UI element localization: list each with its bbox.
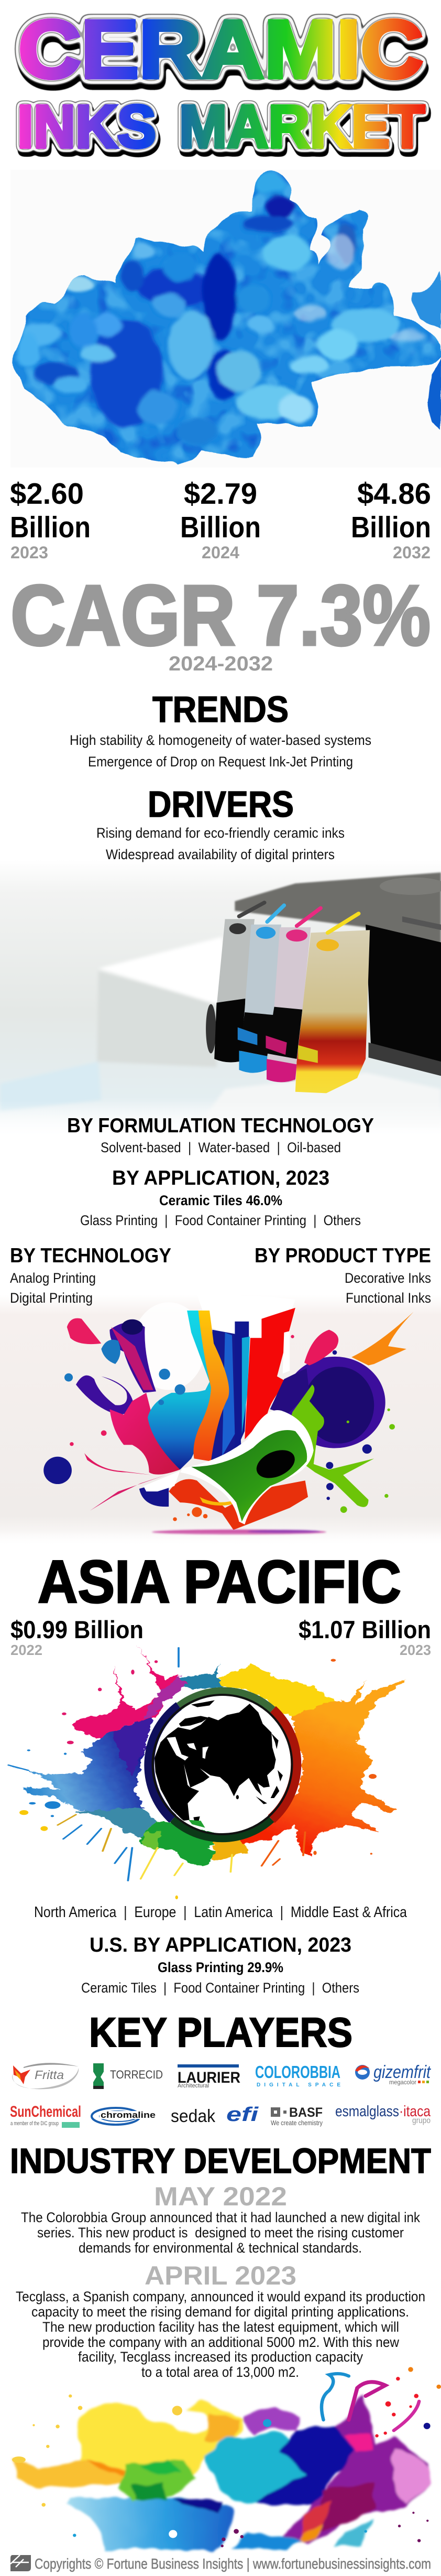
stat: 2024 market size: [180, 477, 261, 562]
panel: by technology: BY TECHNOLOGY: [10, 1244, 171, 1267]
stat: 2032 market size: $4.86: [357, 477, 431, 511]
stat: 2023 market size: $2.60: [10, 477, 84, 511]
development: April 2023: provide the company with an additional 5000 m2. With this new: [42, 2334, 400, 2350]
logo: Laurier: LAURIER: [178, 2069, 240, 2086]
logo: Torrecid: TORRECID: [110, 2068, 163, 2081]
leading U.S. application: Glass Printing 29.9%: [158, 1960, 283, 1975]
trends list: High stability & homogeneity of water-based systems: [70, 732, 371, 748]
stat: Asia Pacific 2022: $0.99 Billion: [10, 1616, 144, 1643]
globe: [154, 1696, 290, 1833]
logo: Fritta: Fritta: [35, 2068, 64, 2082]
heading: trends: TRENDS: [152, 689, 289, 730]
logo: Esmalglass Itaca: [335, 2103, 431, 2125]
stat: 2032 market size: Billion: [351, 511, 431, 544]
logo: Chromaline: chromaline: [101, 2110, 156, 2120]
title line 2: INKS: [17, 93, 156, 160]
leading application: Ceramic Tiles 46.0%: [159, 1193, 282, 1208]
development: April 2023: capacity to meet the rising demand for digital printing applications.: [31, 2304, 409, 2320]
CAGR period: 2024-2032: [169, 653, 273, 675]
stat: Asia Pacific 2022: 2022: [10, 1642, 42, 1658]
stat: Asia Pacific 2023: $1.07 Billion: [299, 1616, 431, 1643]
trends list: Emergence of Drop on Request Ink-Jet Printing: [88, 754, 353, 770]
logo: Esmalglass Itaca: ·itaca: [399, 2103, 431, 2120]
development: April 2023: facility, Tecglass increased its production capacity: [78, 2349, 363, 2365]
title line 1: CERAMIC: [18, 4, 423, 95]
logo: Laurier: [178, 2064, 240, 2089]
heading: by application: BY APPLICATION, 2023: [112, 1167, 329, 1189]
yellow tank: [295, 930, 370, 1093]
stat: Asia Pacific 2022: [10, 1616, 144, 1658]
logo: Esmalglass Itaca: grupo: [412, 2116, 431, 2125]
development: April 2023: APRIL 2023: [145, 2261, 296, 2290]
black tank: [215, 919, 255, 1062]
image: rainbow ink splash: [12, 2367, 441, 2550]
logo: BASF: [271, 2105, 323, 2127]
stat: 2023 market size: Billion: [10, 511, 91, 544]
image: printer with ink tanks: [0, 860, 441, 1139]
trends list: [70, 732, 371, 770]
magenta tank: [267, 927, 311, 1083]
image: colourful paint splash: [0, 1294, 441, 1546]
title line 2: MARKET: [179, 93, 425, 160]
stat: 2024 market size: Billion: [180, 511, 261, 544]
stat: 2032 market size: [351, 477, 431, 562]
development: May 2022: MAY 2022: [154, 2182, 287, 2211]
heading: Asia Pacific: ASIA PACIFIC: [38, 1549, 401, 1616]
stat: 2024 market size: $2.79: [184, 477, 257, 511]
heading: by formulation technology: BY FORMULATION TECHNOLOGY: [67, 1114, 374, 1137]
logo: Gizemfrit: [355, 2062, 431, 2086]
panel: by technology: Analog Printing: [10, 1270, 96, 1286]
logo: Sun Chemical: [10, 2103, 81, 2128]
title line 2: [17, 93, 425, 160]
panel: by product type: Decorative Inks: [345, 1270, 431, 1286]
logo: Fritta: [12, 2063, 79, 2089]
logo: Gizemfrit: megacolor: [389, 2079, 416, 2086]
logo: Torrecid: [93, 2063, 163, 2089]
cyan tank: [239, 925, 281, 1073]
heading: key players: KEY PLAYERS: [89, 2009, 352, 2055]
stat: 2023 market size: 2023: [10, 543, 48, 562]
logo: Sedak: sedak: [171, 2106, 216, 2126]
image: blue ink cloud: [0, 161, 441, 472]
logo: Laurier: Architectural: [178, 2083, 209, 2089]
title: Ceramic Inks Market: [17, 4, 425, 160]
stat: Asia Pacific 2023: 2023: [400, 1642, 431, 1658]
development: May 2022: demands for environmental & technical standards.: [79, 2240, 362, 2256]
logo: BASF: BASF: [289, 2105, 323, 2120]
development: April 2023: The new production facility has the latest equipment, which will: [42, 2319, 399, 2335]
application list: Glass Printing | Food Container Printing | Others: [80, 1213, 361, 1228]
logo: Gizemfrit: gizemfrit: [373, 2062, 431, 2082]
development: April 2023: [16, 2261, 425, 2380]
splash colours: [8, 1645, 408, 1865]
stat: Asia Pacific 2023: [299, 1616, 431, 1658]
stat: 2032 market size: 2032: [393, 543, 431, 562]
panel: by product type: [255, 1244, 431, 1306]
drivers list: [96, 825, 345, 862]
logo: Colorobbia: DIGITAL SPACE: [257, 2082, 340, 2088]
tubes and caps: [239, 903, 359, 933]
background box and table: [0, 937, 441, 1128]
icon: Fortune Business Insights mark: [10, 2555, 31, 2571]
printer body: [235, 872, 441, 944]
logo: Colorobbia: COLOROBBIA: [255, 2062, 340, 2082]
stat: 2024 market size: 2024: [202, 543, 239, 562]
logos: key players: [10, 2062, 431, 2128]
logo: Chromaline: [92, 2108, 156, 2125]
development: April 2023: to a total area of 13,000 m2.: [141, 2364, 299, 2380]
stat: 2023 market size: [10, 477, 91, 562]
drivers list: Widespread availability of digital printers: [106, 847, 335, 862]
heading: U.S. by application: U.S. BY APPLICATION, 2023: [90, 1934, 351, 1956]
logo: Esmalglass Itaca: esmalglass: [335, 2103, 399, 2120]
heading: drivers: DRIVERS: [148, 784, 294, 825]
panel: by technology: [10, 1244, 171, 1306]
logo: BASF: We create chemistry: [271, 2119, 323, 2127]
logo: Sun Chemical: a member of the DIC group: [10, 2120, 59, 2127]
logo: Colorobbia: [255, 2062, 340, 2088]
image: globe paint splash: [8, 1645, 408, 1899]
U.S. application list: Ceramic Tiles | Food Container Printing | Others: [81, 1980, 359, 1996]
panel: by product type: Functional Inks: [346, 1290, 431, 1306]
panel: by technology: Digital Printing: [10, 1290, 93, 1306]
ring around the globe: [149, 1691, 296, 1838]
formulation list: Solvent-based | Water-based | Oil-based: [101, 1140, 341, 1155]
logo: EFI: efi: [226, 2104, 259, 2126]
development: May 2022: series. This new product is designed to meet the rising customer: [37, 2225, 404, 2241]
drips and flecks: [8, 1648, 305, 1881]
logo: Sun Chemical: SunChemical: [10, 2103, 81, 2120]
development: May 2022: [21, 2182, 421, 2256]
drivers list: Rising demand for eco-friendly ceramic inks: [96, 825, 345, 841]
